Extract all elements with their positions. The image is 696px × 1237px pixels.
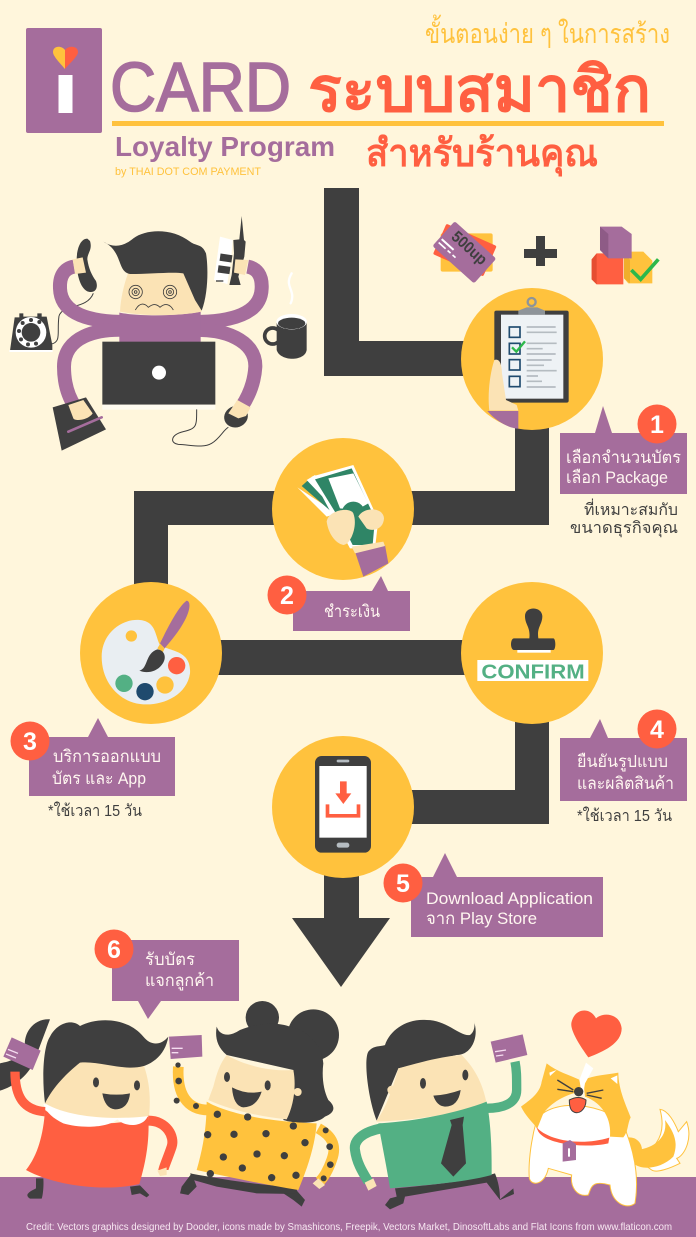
step circle 4: confirm stamp [461, 582, 603, 724]
callout 3: บริการออกแบบ [53, 747, 161, 766]
step circle 5: download phone [272, 736, 414, 878]
badge 5 [384, 864, 422, 902]
title block [110, 14, 670, 178]
step circle 4: confirm stamp: CONFIRM [481, 660, 585, 683]
stressed man illustration [9, 216, 307, 451]
badge 2 [268, 576, 306, 614]
dog tail [617, 1109, 689, 1171]
callout 6: รับบัตร [145, 950, 195, 969]
badge 6: 6 [107, 936, 121, 964]
laptop [102, 342, 215, 410]
body [119, 312, 201, 343]
step circle 2: cash [272, 438, 414, 580]
step circle 1: checklist [461, 288, 603, 430]
title block: by THAI DOT COM PAYMENT [115, 166, 261, 178]
badge 2: 2 [280, 582, 294, 610]
callout 1: เลือก Package [566, 468, 668, 487]
title block: สำหรับร้านคุณ [366, 133, 598, 177]
note: suits your business size: ขนาดธุรกิจคุณ [570, 520, 678, 538]
man in green with tie [355, 1020, 527, 1209]
flow path [134, 188, 549, 824]
callout 2: ชำระเงิน [324, 602, 380, 621]
callout 1: เลือกจำนวนบัตร [566, 448, 681, 467]
callout 6 [94, 930, 239, 1019]
left handset [73, 239, 97, 292]
note: suits your business size [570, 498, 678, 538]
callout 3 [10, 718, 175, 796]
callout 2 [268, 576, 410, 631]
title block: Loyalty Program [115, 131, 335, 162]
notebook and pen [53, 397, 106, 451]
title block: ระบบสมาชิก [308, 56, 651, 125]
mouse and cable [173, 400, 251, 446]
note: suits your business size: ที่เหมาะสมกับ [584, 498, 678, 519]
dog with heart [521, 1011, 689, 1206]
callout 4 [560, 710, 687, 801]
note: takes 15 days: *ใช้เวลา 15 วัน [577, 806, 672, 825]
badge 4: 4 [650, 716, 664, 744]
badge 3 [10, 722, 50, 760]
steam [289, 273, 292, 303]
credit line: Credit: Vectors graphics designed by Dooder, icons made by Smashicons, Freepik, Vectors Market, DinosoftLabs and Flat Icons from www.flaticon.com [26, 1222, 672, 1233]
girl in red [0, 1019, 172, 1199]
dog face [557, 1080, 603, 1113]
step circle 3: palette [80, 582, 222, 724]
dog head fur [521, 1063, 631, 1137]
mug [265, 314, 307, 359]
callout 6: แจกลูกค้า [145, 971, 214, 991]
logo: iCard [26, 28, 102, 133]
arms [60, 267, 262, 407]
note: takes 15 days: *ใช้เวลา 15 วัน [48, 801, 142, 820]
badge 5: 5 [396, 870, 410, 898]
mobile phone [214, 216, 248, 285]
callout 5: Download Application [426, 889, 593, 908]
girl in yellow polka dots [169, 1001, 339, 1207]
heart [571, 1011, 622, 1057]
callout 5: จาก Play Store [426, 909, 537, 928]
ground band [0, 1177, 696, 1237]
cards 500up: 500up [448, 228, 490, 269]
cards 500up [432, 221, 497, 283]
callout 3: บัตร และ App [52, 769, 146, 788]
badge 3: 3 [23, 728, 37, 756]
callout 4: และผลิตสินค้า [577, 774, 674, 793]
title block: CARD [110, 48, 291, 126]
rotary phone [9, 293, 93, 352]
arrow down [292, 860, 390, 987]
callout 4: ยืนยันรูปแบบ [577, 752, 668, 772]
dog collar and tag [536, 1127, 609, 1162]
face [103, 231, 207, 315]
plus sign [524, 236, 557, 266]
badge 1: 1 [650, 411, 664, 439]
badge 6 [94, 930, 134, 968]
blocks with checkmark [592, 227, 658, 284]
callout 1 [560, 404, 687, 494]
callout 5 [384, 853, 603, 937]
dog body [529, 1105, 637, 1206]
